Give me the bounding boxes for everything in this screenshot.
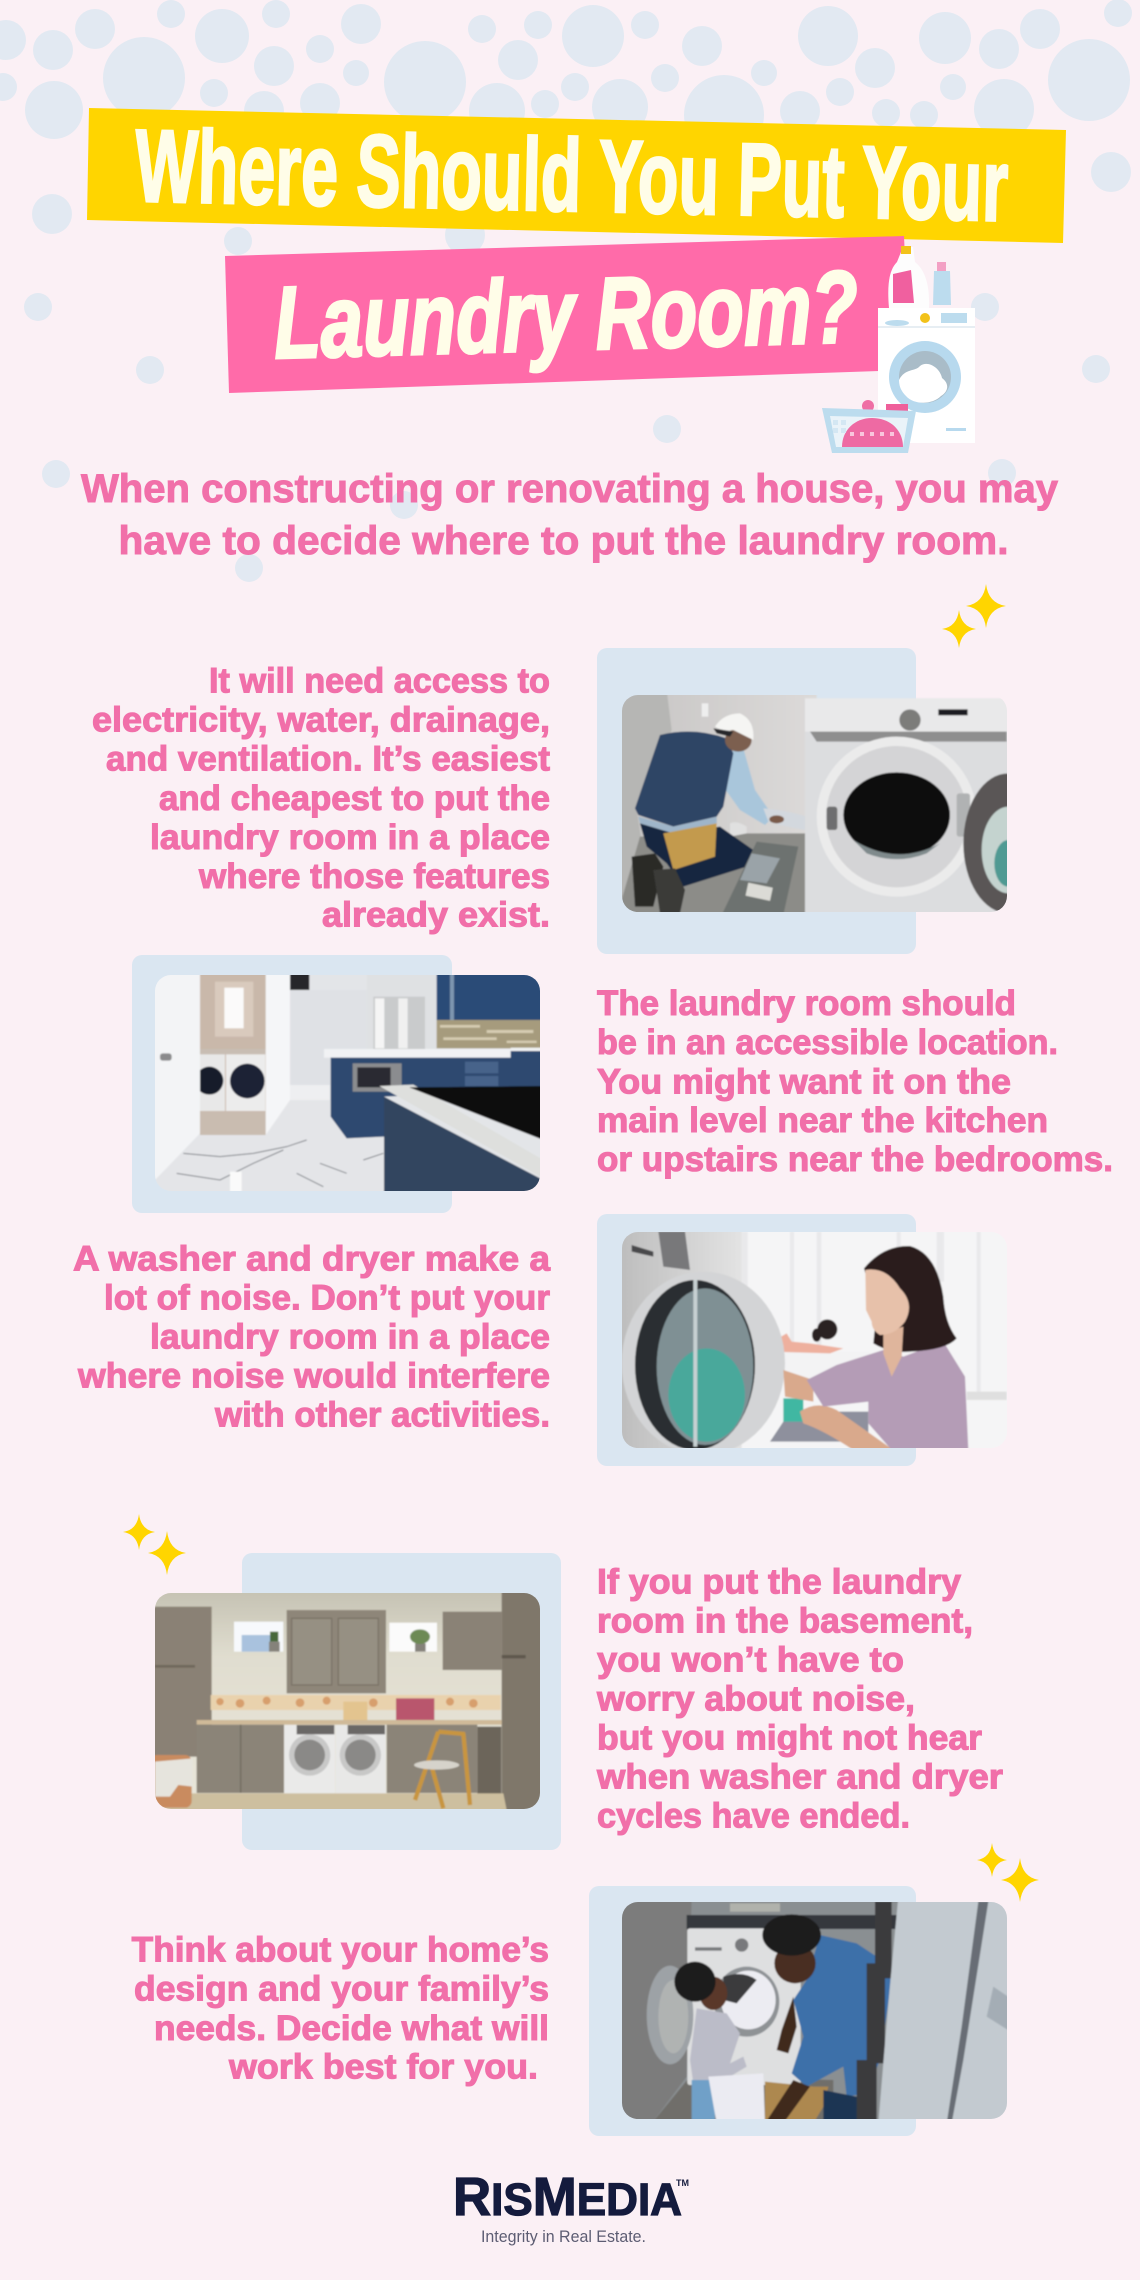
text block 5 <box>132 1931 549 2087</box>
text block 1: It will need access to <box>209 662 550 701</box>
text block 1: and ventilation. It’s easiest <box>106 740 550 779</box>
text block 2: The laundry room should <box>597 984 1016 1023</box>
text block 2 <box>597 984 1113 1179</box>
intro text: When constructing or renovating a house, you may <box>81 467 1059 511</box>
panel: photo of father and son at washer <box>589 1886 1013 2136</box>
text block 2: be in an accessible location. <box>597 1023 1058 1062</box>
text block 5: design and your family’s <box>134 1970 549 2009</box>
icon: sparkles middle <box>123 1514 186 1575</box>
text block 4: you won’t have to <box>597 1641 904 1680</box>
icon: washing machine with detergent and basket <box>822 246 975 453</box>
text block 3 <box>73 1240 551 1435</box>
intro text <box>81 467 1059 563</box>
text block 3: lot of noise. Don’t put your <box>104 1278 550 1317</box>
icon: detergent bottle <box>888 246 951 308</box>
icon: sparkles lower <box>977 1843 1039 1902</box>
text block 4: room in the basement, <box>597 1602 973 1641</box>
text block 2: main level near the kitchen <box>597 1101 1048 1140</box>
text block 3: where noise would interfere <box>77 1356 550 1395</box>
title banner: yellow <box>87 108 1066 243</box>
logo tagline: Integrity in Real Estate. <box>481 2227 646 2246</box>
text block 4: when washer and dryer <box>596 1757 1003 1796</box>
panel: photo of technician at dryer <box>597 648 1007 954</box>
text block 4: worry about noise, <box>596 1680 915 1719</box>
text block 4: If you put the laundry <box>597 1562 962 1601</box>
text block 1: where those features <box>198 857 550 896</box>
intro text: have to decide where to put the laundry room. <box>118 519 1008 563</box>
photo: kitchen with washer <box>150 970 547 1197</box>
photo: woman loading washer <box>617 1227 1013 1455</box>
text block 3: with other activities. <box>214 1396 550 1435</box>
logo wordmark: RISMEDIA <box>453 2167 682 2227</box>
text block 4: but you might not hear <box>597 1718 982 1757</box>
logo: RISMedia <box>453 2167 689 2246</box>
text block 1: laundry room in a place <box>150 818 550 857</box>
text block 5: needs. Decide what will <box>154 2009 549 2048</box>
panel: photo of kitchen and laundry <box>132 955 547 1213</box>
photo: father and son <box>617 1897 1013 2123</box>
text block 1: already exist. <box>322 896 550 935</box>
photo: cabinet laundry room <box>150 1588 547 1815</box>
icon: sparkles top <box>942 584 1006 648</box>
photo: technician <box>622 695 1007 912</box>
soap bubbles background <box>0 0 1132 582</box>
text block 1: and cheapest to put the <box>159 779 550 818</box>
icon: laundry basket <box>822 400 916 453</box>
text block 2: or upstairs near the bedrooms. <box>597 1140 1113 1179</box>
text block 4: cycles have ended. <box>597 1796 910 1835</box>
text block 1: electricity, water, drainage, <box>92 701 550 740</box>
icon: washer body <box>878 308 975 443</box>
text block 3: laundry room in a place <box>150 1318 550 1357</box>
title line 2: Laundry Room? <box>272 250 859 380</box>
text block 3: A washer and dryer make a <box>73 1240 551 1279</box>
logo trademark: TM <box>676 2178 689 2188</box>
text block 5: Think about your home’s <box>132 1931 549 1970</box>
text block 1 <box>92 662 550 935</box>
panel: photo of woman at washer <box>597 1214 1013 1466</box>
text block 5: work best for you. <box>228 2048 538 2087</box>
text block 2: You might want it on the <box>597 1062 1011 1101</box>
panel: photo of laundry room cabinets <box>150 1553 561 1850</box>
text block 4 <box>596 1562 1003 1835</box>
title banner: pink <box>225 236 910 393</box>
